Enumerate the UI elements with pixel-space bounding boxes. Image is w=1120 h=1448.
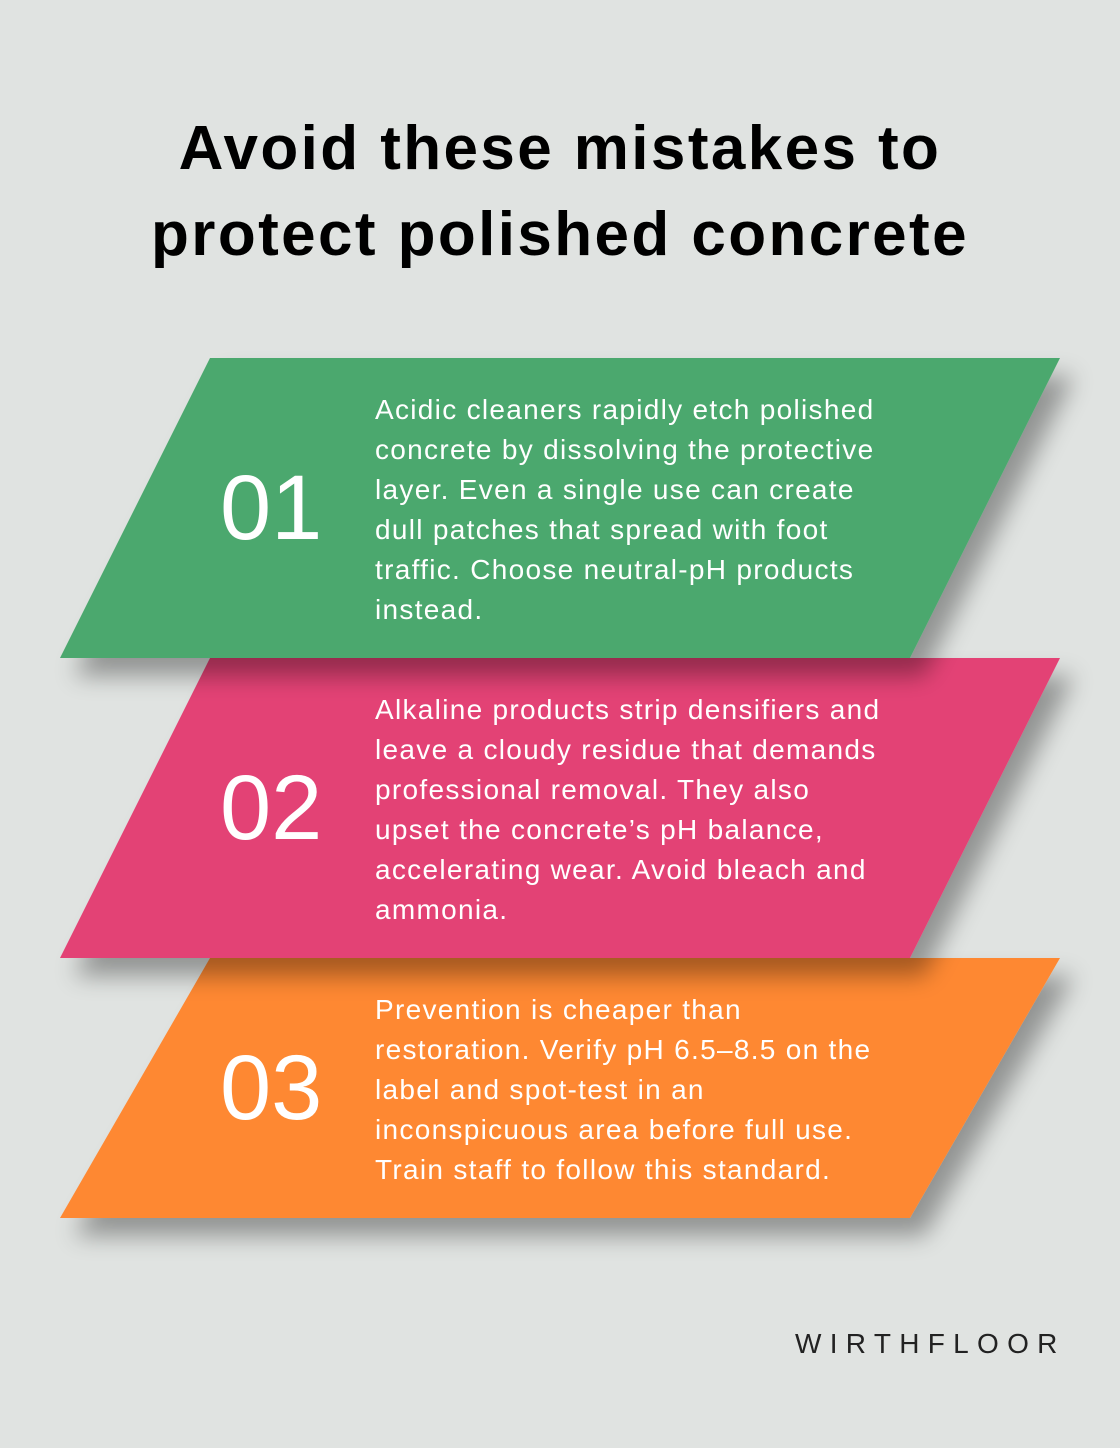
text 02: upset the concrete’s pH balance, [375, 814, 824, 845]
title: protect polished concrete [151, 200, 969, 269]
text 03: inconspicuous area before full use. [375, 1114, 853, 1145]
band 3 [60, 958, 1060, 1218]
text 02: Alkaline products strip densifiers and [375, 694, 880, 725]
title: Avoid these mistakes to [179, 114, 941, 183]
text 03: restoration. Verify pH 6.5–8.5 on the [375, 1034, 871, 1065]
text 03: Train staff to follow this standard. [375, 1154, 831, 1185]
text 02 [375, 694, 880, 925]
number 01: 01 [220, 457, 322, 559]
text 01: dull patches that spread with foot [375, 514, 829, 545]
logo: WIRTHFLOOR [795, 1328, 1066, 1359]
number 03: 03 [220, 1037, 322, 1139]
text 02: professional removal. They also [375, 774, 810, 805]
text 03: label and spot-test in an [375, 1074, 705, 1105]
text 01: Acidic cleaners rapidly etch polished [375, 394, 874, 425]
text 01: layer. Even a single use can create [375, 474, 855, 505]
text 01: traffic. Choose neutral-pH products [375, 554, 854, 585]
text 01 [375, 394, 874, 625]
text 02: ammonia. [375, 894, 508, 925]
number 02: 02 [220, 757, 322, 859]
title [151, 114, 969, 269]
text 02: accelerating wear. Avoid bleach and [375, 854, 867, 885]
text 03 [375, 994, 871, 1185]
text 02: leave a cloudy residue that demands [375, 734, 877, 765]
band 1 [60, 358, 1060, 658]
band 2 [60, 658, 1060, 958]
text 01: concrete by dissolving the protective [375, 434, 874, 465]
text 01: instead. [375, 594, 483, 625]
text 03: Prevention is cheaper than [375, 994, 742, 1025]
